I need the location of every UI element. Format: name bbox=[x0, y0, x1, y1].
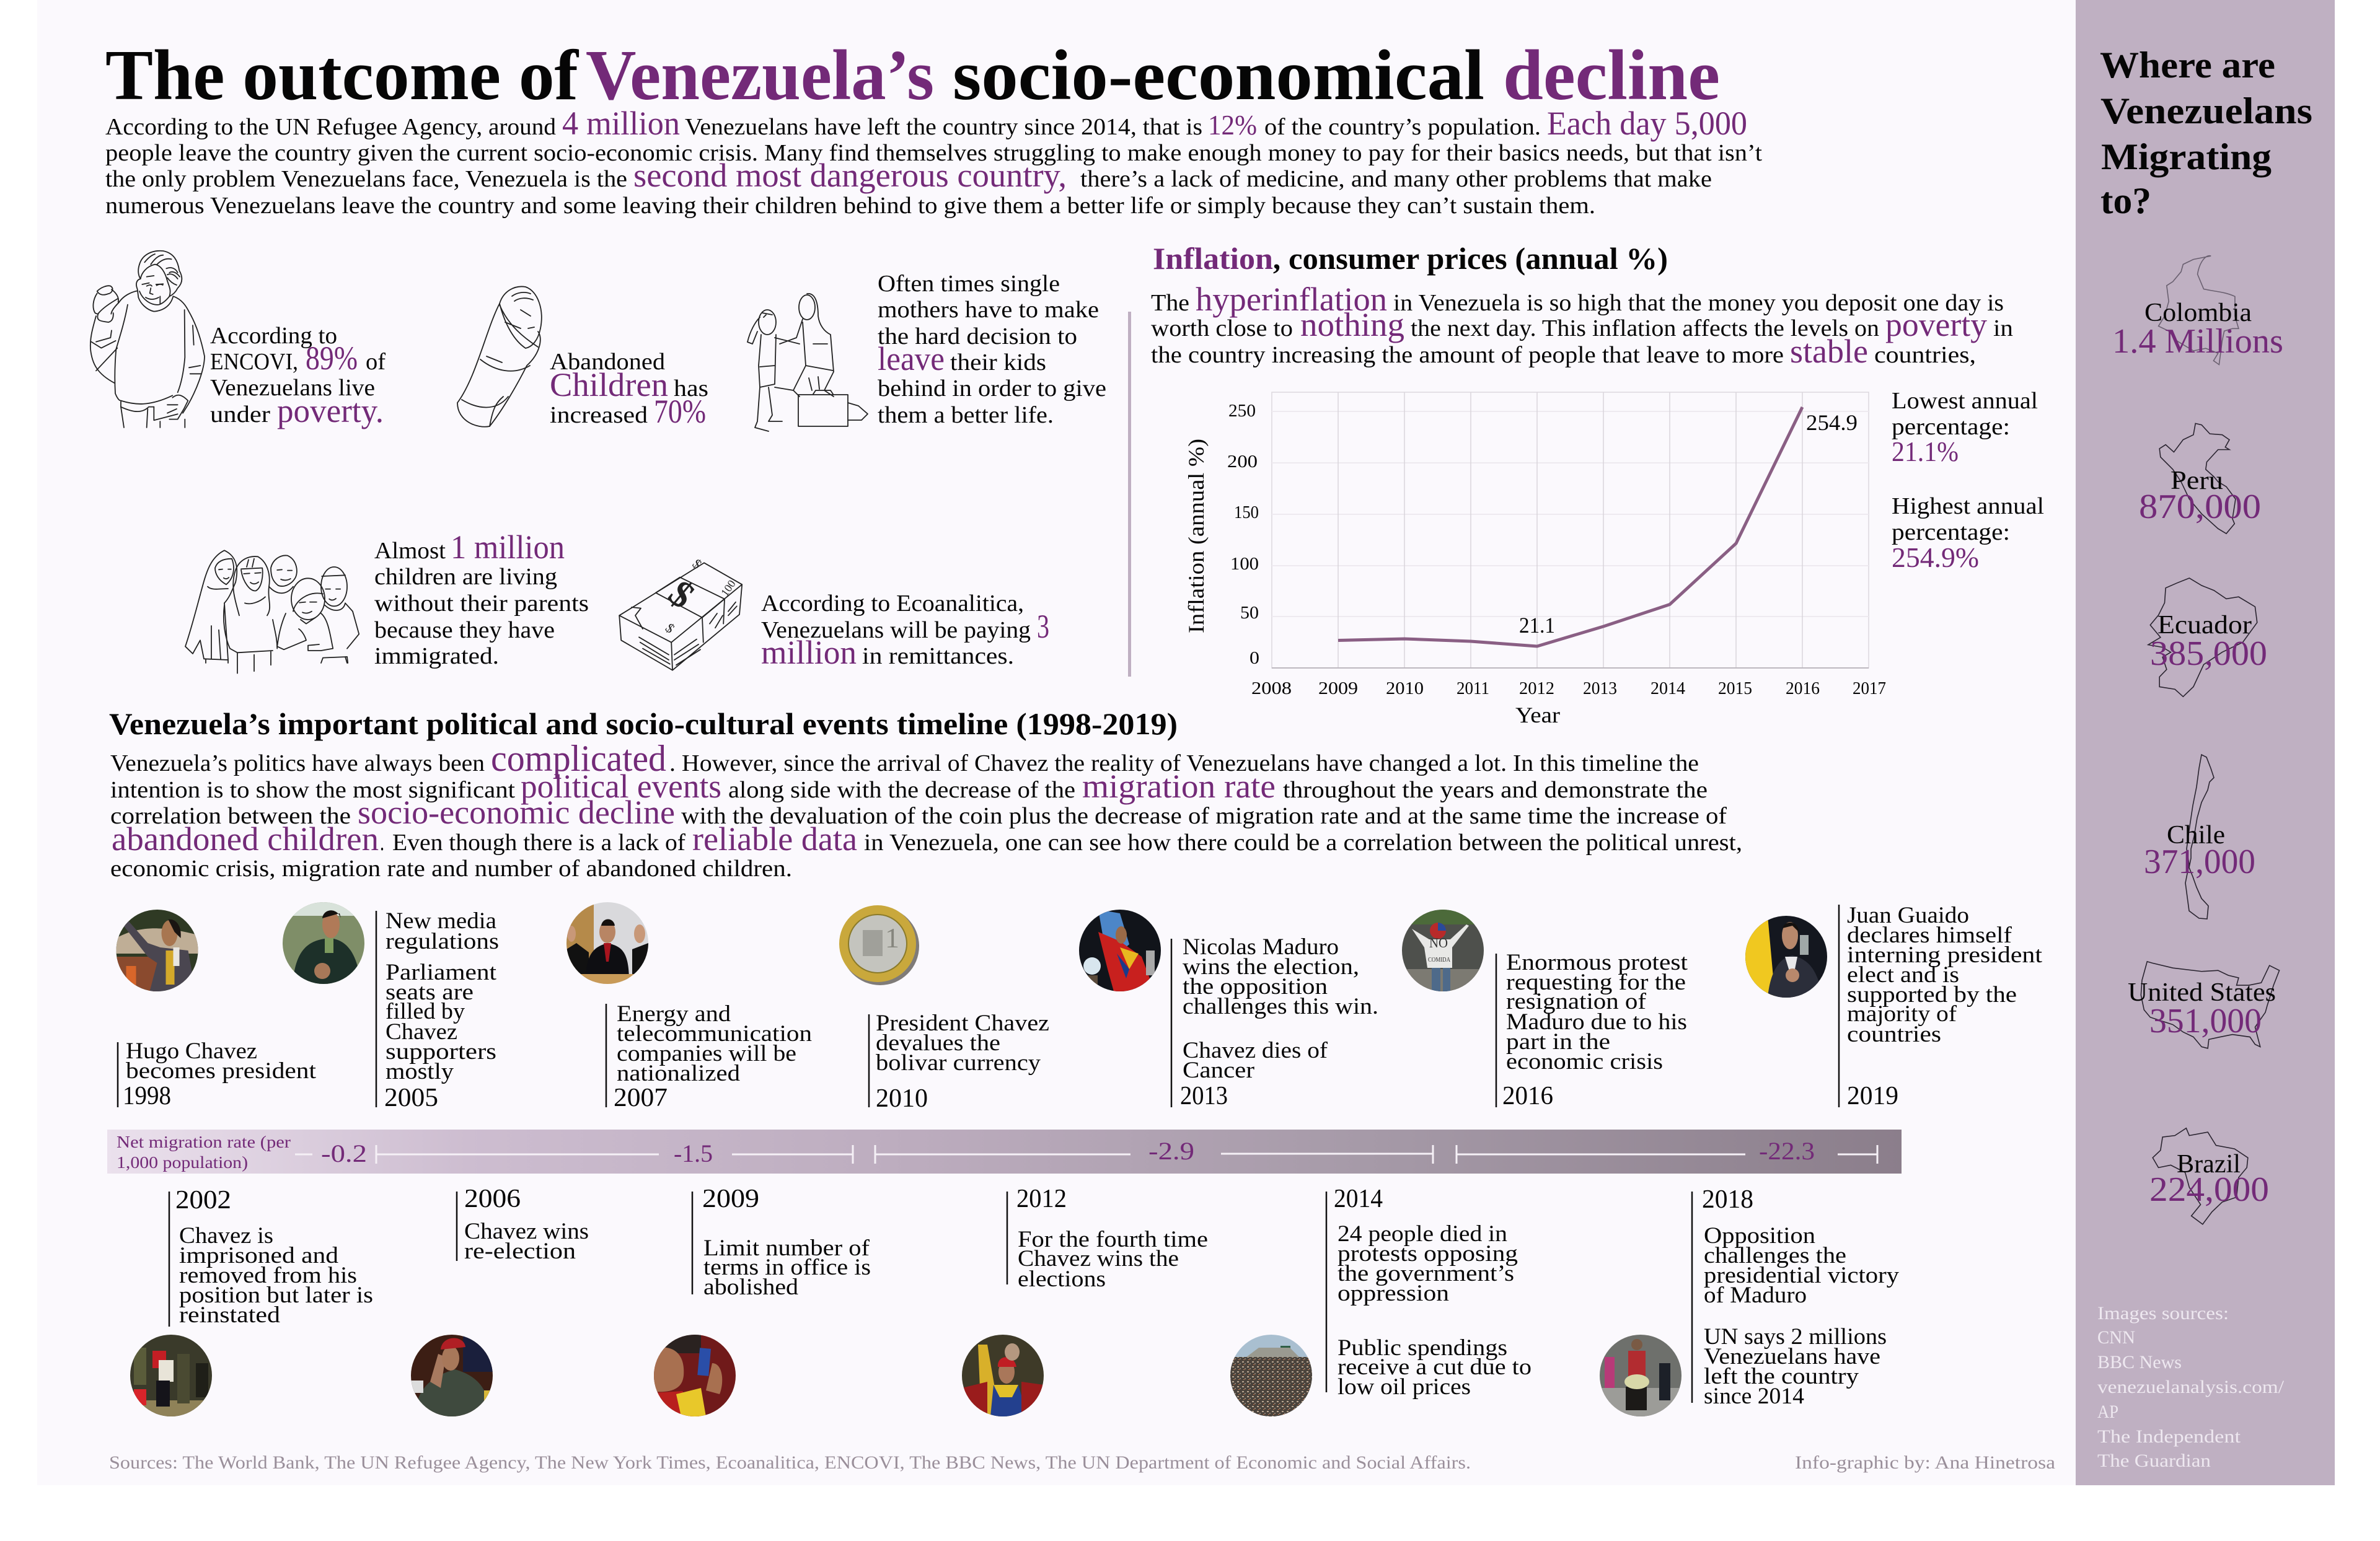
line chart: inflation: 254.9 bbox=[1806, 410, 1858, 435]
text block: 89% poverty: 89% bbox=[306, 340, 358, 377]
callout: lowest and highest annual percentage: percentage: bbox=[1892, 414, 2010, 440]
image sources list bbox=[2097, 1303, 2285, 1471]
timeline entry: 2007: telecommunication bbox=[617, 1021, 812, 1047]
net migration rate band: -1.5 bbox=[674, 1139, 713, 1167]
timeline entry: 2005: Chavez bbox=[386, 1019, 457, 1045]
callout: lowest and highest annual percentage: percentage: bbox=[1892, 519, 2010, 545]
intro paragraph: Venezuelans have left the country since 2014, that is bbox=[685, 114, 1202, 140]
timeline entry: 2010: 2010 bbox=[876, 1084, 928, 1113]
inflation paragraph: The bbox=[1151, 290, 1189, 316]
timeline entry: 2007: 2007 bbox=[614, 1084, 668, 1112]
timeline entry: 1998: Hugo Chavez bbox=[126, 1038, 257, 1064]
image sources list: The Independent bbox=[2097, 1426, 2241, 1447]
timeline entry: 2006: re-election bbox=[464, 1239, 576, 1264]
photo: 2002 coup crowd bbox=[130, 1335, 212, 1416]
timeline entry: 2019 bbox=[1839, 903, 2043, 1110]
icon: stack of money: $ bbox=[661, 573, 702, 617]
panel heading: Venezuelans bbox=[2100, 90, 2312, 131]
text block: 89% poverty: poverty. bbox=[277, 392, 384, 429]
timeline entry: 2019: countries bbox=[1847, 1022, 1941, 1047]
timeline entry: 2012: Chavez wins the bbox=[1018, 1246, 1179, 1271]
callout: lowest and highest annual percentage bbox=[1892, 388, 2044, 573]
timeline entry: 2010 bbox=[869, 1011, 1049, 1113]
text block: 1 million children: without their parents bbox=[374, 590, 589, 617]
map and figure: Ecuador: Ecuador bbox=[2157, 611, 2252, 639]
timeline entry: 2005: seats are bbox=[386, 980, 474, 1005]
callout: lowest and highest annual percentage: Highest annual bbox=[1892, 493, 2044, 519]
text block: single mothers: the hard decision to bbox=[878, 323, 1077, 349]
timeline paragraph: . bbox=[380, 830, 384, 856]
timeline entry: 2009: Limit number of bbox=[703, 1236, 870, 1261]
timeline entry: 2013: Chavez dies of bbox=[1183, 1038, 1328, 1063]
footer: sources: Sources: The World Bank, The UN Refugee Agency, The New York Times, Ecoanalitica, ENCOVI, The BBC News, The UN Department of Economic and Social Affairs. bbox=[109, 1452, 1471, 1473]
timeline entry: 2014: receive a cut due to bbox=[1338, 1354, 1532, 1380]
timeline entry: 2018: since 2014 bbox=[1704, 1384, 1804, 1409]
timeline entry: 2010: President Chavez bbox=[876, 1011, 1049, 1036]
timeline entry: 2019: interning president bbox=[1847, 942, 2043, 968]
timeline entry: 2005: Parliament bbox=[386, 960, 497, 985]
photo: crowd protest 2014 bbox=[1230, 1335, 1312, 1416]
text block: 1 million children: 1 million bbox=[451, 529, 565, 566]
timeline entry: 2002 bbox=[169, 1186, 373, 1328]
photo: bolivar coin: 1 bbox=[885, 922, 899, 954]
title: The outcome of bbox=[105, 36, 579, 115]
intro paragraph: numerous Venezuelans leave the country and some leaving their children behind to give them a better life or simply because they can’t sustain them. bbox=[105, 193, 1595, 219]
timeline entry: 2016: economic crisis bbox=[1506, 1049, 1663, 1074]
timeline entry: 1998: becomes president bbox=[126, 1058, 317, 1084]
text block: single mothers: their kids bbox=[950, 349, 1046, 375]
timeline entry: 2019: elect and is bbox=[1847, 962, 1959, 988]
timeline entry: 2013 bbox=[1171, 934, 1378, 1110]
line chart: inflation: 21.1 bbox=[1519, 613, 1555, 638]
photo: Guaido 2019 bbox=[1745, 916, 1827, 998]
timeline paragraph: migration rate bbox=[1082, 768, 1276, 805]
inflation paragraph: nothing bbox=[1300, 306, 1404, 343]
timeline entry: 2013: 2013 bbox=[1180, 1082, 1228, 1110]
map and figure: Peru: 870,000 bbox=[2139, 488, 2261, 526]
inflation paragraph: worth close to bbox=[1151, 315, 1293, 341]
timeline entry: 2002: position but later is bbox=[179, 1283, 373, 1308]
timeline entry: 2018: challenges the bbox=[1704, 1243, 1846, 1268]
intro paragraph: According to the UN Refugee Agency, around bbox=[105, 114, 556, 140]
photo: Maduro 2013 bbox=[1079, 910, 1161, 991]
intro paragraph: 4 million bbox=[562, 105, 680, 142]
timeline entry: 2019: supported by the bbox=[1847, 982, 2017, 1008]
map and figure: United States: 351,000 bbox=[2149, 1002, 2262, 1040]
photo: migrants walking 2018 bbox=[1600, 1335, 1681, 1416]
icon: group of children bbox=[185, 550, 359, 674]
panel heading: Where are bbox=[2100, 45, 2275, 86]
net migration rate band: -0.2 bbox=[321, 1139, 367, 1167]
callout: lowest and highest annual percentage: Lowest annual bbox=[1892, 388, 2038, 414]
line chart: inflation: 2014 bbox=[1651, 679, 1685, 698]
line chart: inflation: 100 bbox=[1230, 555, 1259, 574]
text block: abandoned children bbox=[550, 349, 708, 430]
icon: stack of money bbox=[619, 556, 742, 670]
timeline entry: 2018: left the country bbox=[1704, 1364, 1859, 1389]
icon: swaddled baby bbox=[457, 286, 542, 427]
timeline entry: 2018 bbox=[1692, 1185, 1900, 1409]
timeline paragraph: reliable data bbox=[692, 820, 857, 858]
timeline entry: 2009: abolished bbox=[703, 1275, 799, 1300]
line chart: inflation: 50 bbox=[1240, 604, 1259, 623]
photo: protest 2016: COMIDA bbox=[1428, 956, 1450, 964]
timeline paragraph: . However, since the arrival of Chavez the reality of Venezuelans have changed a lot. In this timeline the bbox=[669, 750, 1699, 776]
heading: inflation: consumer prices (annual %) bbox=[1289, 241, 1668, 276]
inflation paragraph: the country increasing the amount of people that leave to more bbox=[1151, 342, 1784, 368]
map and figure: Colombia bbox=[2112, 256, 2283, 364]
title: Venezuela’s bbox=[586, 36, 934, 115]
intro paragraph: people leave the country given the current socio-economic crisis. Many find themselves struggling to make enough money to pay for their basics needs, but that isn’t bbox=[105, 140, 1762, 166]
map and figure: Brazil: 224,000 bbox=[2149, 1170, 2269, 1209]
title: socio-economical bbox=[953, 36, 1484, 115]
text block: remittances: million bbox=[761, 634, 857, 671]
timeline entry: 2014: low oil prices bbox=[1338, 1374, 1471, 1400]
heading: timeline: Venezuela’s important political and socio-cultural events timeline (1998-2019) bbox=[109, 706, 1178, 741]
icon: stack of money: 100 bbox=[718, 577, 738, 599]
timeline entry: 2016: 2016 bbox=[1502, 1082, 1553, 1110]
text block: 89% poverty: According to bbox=[210, 323, 337, 349]
text block: 1 million children: immigrated. bbox=[374, 643, 499, 669]
timeline paragraph: Even though there is a lack of bbox=[392, 830, 685, 856]
timeline entry: 2018: UN says 2 millions bbox=[1704, 1324, 1887, 1350]
timeline entry: 2002: Chavez is bbox=[179, 1223, 273, 1249]
net migration rate band bbox=[107, 1130, 1902, 1174]
inflation paragraph bbox=[1151, 281, 2013, 370]
line chart: inflation: 2011 bbox=[1457, 679, 1489, 698]
intro paragraph: second most dangerous country, bbox=[633, 157, 1067, 194]
panel heading bbox=[2100, 45, 2312, 221]
line chart: inflation: 2015 bbox=[1718, 679, 1752, 698]
timeline entry: 2013: Cancer bbox=[1183, 1058, 1254, 1083]
map and figure: Peru bbox=[2139, 423, 2261, 533]
text block: single mothers bbox=[878, 271, 1106, 428]
text block: single mothers: leave bbox=[878, 340, 945, 377]
inflation paragraph: hyperinflation bbox=[1196, 281, 1387, 318]
timeline entry: 2018: Venezuelans have bbox=[1704, 1344, 1880, 1369]
timeline entry: 2005: 2005 bbox=[384, 1084, 438, 1112]
image sources list: venezuelanalysis.com/ bbox=[2097, 1377, 2285, 1397]
timeline entry: 2018: presidential victory bbox=[1704, 1263, 1900, 1288]
timeline entry: 2014: Public spendings bbox=[1338, 1335, 1507, 1361]
inflation paragraph: countries, bbox=[1874, 342, 1976, 368]
photo: protest 2016 bbox=[1402, 910, 1484, 991]
text block: 89% poverty: Venezuelans live bbox=[210, 375, 375, 401]
line chart: inflation: Year bbox=[1515, 703, 1560, 727]
text block: 1 million children bbox=[374, 529, 589, 669]
intro paragraph: the only problem Venezuelans face, Venezuela is the bbox=[105, 166, 627, 192]
photo: Hugo Chavez 1998 bbox=[117, 910, 198, 991]
timeline entry: 2018: of Maduro bbox=[1704, 1283, 1807, 1308]
photo: protest 2016: NO bbox=[1429, 935, 1448, 951]
net migration rate band: -2.9 bbox=[1148, 1137, 1194, 1165]
inflation paragraph: in bbox=[1993, 315, 2013, 341]
timeline entry: 2016: Maduro due to his bbox=[1506, 1009, 1687, 1035]
map and figure: Ecuador bbox=[2148, 578, 2267, 696]
text block: single mothers: behind in order to give bbox=[878, 375, 1106, 402]
timeline entry: 2014 bbox=[1326, 1185, 1532, 1400]
inflation paragraph: poverty bbox=[1885, 306, 1987, 343]
title: decline bbox=[1503, 36, 1720, 115]
inflation paragraph: the next day. This inflation affects the levels on bbox=[1411, 315, 1879, 341]
image sources list: AP bbox=[2097, 1402, 2118, 1422]
line chart: inflation: 2008 bbox=[1251, 679, 1292, 698]
text block: remittances bbox=[761, 590, 1049, 671]
line chart: inflation bbox=[1184, 392, 1886, 727]
timeline entry: 2002: imprisoned and bbox=[179, 1243, 339, 1268]
text block: remittances: According to Ecoanalitica, bbox=[761, 590, 1024, 617]
timeline paragraph: with the devaluation of the coin plus the decrease of migration rate and at the same time the increase of bbox=[681, 803, 1727, 829]
timeline paragraph: economic crisis, migration rate and number of abandoned children. bbox=[110, 856, 792, 882]
footer: author: Info-graphic by: Ana Hinetrosa bbox=[1795, 1452, 2055, 1473]
photo: Chavez 2012 rally bbox=[962, 1335, 1044, 1416]
text block: single mothers: Often times single bbox=[878, 271, 1060, 297]
intro paragraph: there’s a lack of medicine, and many other problems that make bbox=[1080, 166, 1712, 192]
text block: remittances: Venezuelans will be paying bbox=[761, 617, 1031, 643]
timeline entry: 2007: nationalized bbox=[617, 1061, 741, 1086]
heading: inflation: , bbox=[1273, 241, 1280, 276]
map and figure: Colombia: Colombia bbox=[2144, 299, 2252, 327]
heading: inflation: Inflation bbox=[1153, 241, 1273, 276]
line chart: inflation: 0 bbox=[1250, 649, 1259, 668]
inflation paragraph: stable bbox=[1790, 333, 1868, 370]
timeline entry: 2007: Energy and bbox=[617, 1001, 731, 1027]
map and figure: Chile bbox=[2144, 755, 2255, 919]
map and figure: Chile: Chile bbox=[2167, 821, 2225, 850]
image sources list: CNN bbox=[2097, 1327, 2135, 1348]
photo: bolivar coin bbox=[839, 905, 919, 985]
line chart: inflation: 2016 bbox=[1786, 679, 1820, 698]
image sources list: The Guardian bbox=[2097, 1451, 2211, 1471]
timeline entry: 1998 bbox=[118, 1038, 317, 1110]
timeline paragraph: correlation between the bbox=[110, 803, 351, 829]
timeline entry: 2014: 24 people died in bbox=[1338, 1221, 1507, 1247]
text block: 89% poverty: ENCOVI, bbox=[210, 349, 298, 375]
timeline paragraph: in Venezuela, one can see how there could be a correlation between the political unrest, bbox=[864, 830, 1742, 856]
map and figure: United States bbox=[2128, 962, 2280, 1048]
panel heading: Migrating bbox=[2101, 136, 2272, 177]
line chart: inflation: 2017 bbox=[1853, 679, 1886, 698]
timeline entry: 2006: Chavez wins bbox=[464, 1219, 589, 1244]
timeline entry: 2006 bbox=[457, 1185, 589, 1264]
icon: elderly woman line drawing bbox=[90, 251, 205, 428]
panel: where are Venezuelans migrating bbox=[2076, 0, 2335, 1485]
timeline paragraph: along side with the decrease of the bbox=[728, 777, 1075, 803]
timeline entry: 2005 bbox=[376, 908, 499, 1112]
timeline entry: 2014: the government’s bbox=[1338, 1261, 1514, 1286]
timeline entry: 2016: part in the bbox=[1506, 1029, 1610, 1055]
text block: 1 million children: because they have bbox=[374, 617, 555, 643]
timeline entry: 2005: regulations bbox=[386, 929, 499, 954]
callout: lowest and highest annual percentage: 21.1% bbox=[1892, 436, 1959, 467]
intro paragraph: Each day 5,000 bbox=[1547, 105, 1747, 142]
line chart: inflation: 2013 bbox=[1583, 679, 1617, 698]
timeline entry: 2005: New media bbox=[386, 908, 496, 934]
intro paragraph: 12% bbox=[1208, 109, 1257, 141]
text block: abandoned children: increased bbox=[550, 402, 648, 428]
timeline entry: 2019: majority of bbox=[1847, 1001, 1957, 1027]
timeline entry: 2007: companies will be bbox=[617, 1041, 796, 1066]
timeline entry: 2002: removed from his bbox=[179, 1263, 357, 1288]
timeline entry: 2016: resignation of bbox=[1506, 989, 1647, 1014]
photo: Chavez salute 2006 bbox=[411, 1335, 493, 1416]
line chart: inflation: Inflation (annual %) bbox=[1184, 439, 1209, 633]
inflation paragraph: in Venezuela is so high that the money you deposit one day is bbox=[1393, 290, 2004, 316]
timeline entry: 2009 bbox=[692, 1185, 871, 1300]
timeline paragraph: intention is to show the most significant bbox=[110, 777, 515, 803]
text block: single mothers: mothers have to make bbox=[878, 297, 1099, 323]
timeline entry: 2009: terms in office is bbox=[703, 1255, 871, 1280]
text block: abandoned children: Abandoned bbox=[550, 349, 665, 375]
timeline entry: 2005: supporters bbox=[386, 1039, 496, 1065]
timeline entry: 2019: 2019 bbox=[1847, 1082, 1898, 1110]
text block: abandoned children: Children bbox=[550, 366, 668, 403]
timeline entry: 2012: elections bbox=[1018, 1267, 1106, 1292]
line chart: inflation: 200 bbox=[1227, 452, 1258, 472]
timeline entry: 2014: protests opposing bbox=[1338, 1241, 1518, 1267]
map and figure: Chile: 371,000 bbox=[2144, 843, 2255, 881]
timeline entry: 2010: bolivar currency bbox=[876, 1050, 1041, 1076]
icon: mother and child with suitcase bbox=[747, 294, 868, 431]
timeline entry: 2012: 2012 bbox=[1016, 1185, 1067, 1213]
timeline entry: 2012: For the fourth time bbox=[1018, 1227, 1208, 1252]
timeline entry: 2016: requesting for the bbox=[1506, 970, 1686, 995]
timeline entry: 2012 bbox=[1007, 1185, 1208, 1292]
timeline paragraph: abandoned children bbox=[112, 820, 379, 858]
timeline entry: 2014: 2014 bbox=[1334, 1185, 1383, 1213]
map and figure: Peru: Peru bbox=[2171, 467, 2223, 495]
map and figure: Ecuador: 385,000 bbox=[2150, 634, 2267, 673]
timeline entry: 2014: oppression bbox=[1338, 1281, 1449, 1306]
callout: lowest and highest annual percentage: 254.9% bbox=[1892, 542, 1979, 573]
line chart: inflation: 2012 bbox=[1519, 679, 1554, 698]
text block: abandoned children: has bbox=[674, 375, 708, 402]
timeline entry: 2013: challenges this win. bbox=[1183, 994, 1378, 1019]
map and figure: Brazil: Brazil bbox=[2177, 1150, 2241, 1179]
image sources list: Images sources: bbox=[2097, 1303, 2229, 1324]
timeline entry: 2013: wins the election, bbox=[1183, 954, 1359, 980]
text block: 1 million children: children are living bbox=[374, 564, 557, 590]
text block: abandoned children: 70% bbox=[654, 393, 706, 430]
timeline entry: 2019: Juan Guaido bbox=[1847, 903, 1969, 928]
map and figure: Colombia: 1.4 Millions bbox=[2112, 322, 2283, 361]
text block: 89% poverty bbox=[210, 323, 386, 429]
text block: remittances: 3 bbox=[1037, 608, 1049, 645]
timeline entry: 2009: 2009 bbox=[702, 1185, 759, 1213]
timeline entry: 2005: filled by bbox=[386, 999, 465, 1024]
intro paragraph: of the country’s population. bbox=[1264, 114, 1541, 140]
timeline entry: 2002: 2002 bbox=[175, 1186, 231, 1214]
timeline entry: 2018: 2018 bbox=[1702, 1185, 1753, 1214]
timeline entry: 2016: Enormous protest bbox=[1506, 950, 1688, 975]
timeline entry: 2002: reinstated bbox=[179, 1302, 281, 1328]
text block: single mothers: them a better life. bbox=[878, 402, 1054, 428]
line chart: inflation: 150 bbox=[1234, 503, 1259, 522]
title bbox=[105, 36, 1720, 115]
photo: Chavez 2005 bbox=[283, 902, 364, 984]
timeline paragraph bbox=[110, 738, 1742, 882]
photo: Chavez with constitution 2009 bbox=[654, 1335, 736, 1416]
icon: stack of money: $ bbox=[690, 556, 705, 572]
text block: 89% poverty: under bbox=[210, 402, 270, 428]
timeline paragraph: complicated bbox=[491, 738, 666, 779]
intro paragraph bbox=[105, 105, 1762, 219]
timeline paragraph: political events bbox=[521, 768, 721, 805]
timeline entry: 2013: the opposition bbox=[1183, 974, 1328, 999]
text block: 89% poverty: of bbox=[366, 349, 386, 375]
line chart: inflation: 250 bbox=[1228, 402, 1256, 421]
line chart: inflation: 2009 bbox=[1318, 679, 1358, 698]
timeline paragraph: throughout the years and demonstrate the bbox=[1283, 777, 1708, 803]
photo: press conference 2007 bbox=[566, 902, 648, 984]
net migration rate band: Net migration rate (per bbox=[117, 1133, 291, 1151]
net migration rate band: 1,000 population) bbox=[117, 1153, 248, 1172]
timeline entry: 2005: mostly bbox=[386, 1059, 454, 1084]
timeline entry: 1998: 1998 bbox=[123, 1082, 171, 1110]
timeline entry: 2018: Opposition bbox=[1704, 1223, 1815, 1249]
icon: stack of money: $ bbox=[663, 620, 677, 636]
timeline entry: 2013: Nicolas Maduro bbox=[1183, 934, 1339, 960]
panel heading: to? bbox=[2100, 180, 2151, 221]
line chart: inflation: 2010 bbox=[1386, 679, 1424, 698]
text block: 1 million children: Almost bbox=[374, 538, 446, 564]
text block: remittances: in remittances. bbox=[862, 643, 1014, 669]
timeline entry: 2006: 2006 bbox=[464, 1185, 521, 1213]
timeline entry: 2019: declares himself bbox=[1847, 923, 2012, 948]
map and figure: United States: United States bbox=[2128, 978, 2276, 1007]
timeline entry: 2010: devalues the bbox=[876, 1030, 1000, 1056]
timeline paragraph: socio-economic decline bbox=[358, 794, 675, 831]
timeline entry: 2016 bbox=[1496, 950, 1688, 1110]
net migration rate band: -22.3 bbox=[1759, 1137, 1815, 1165]
map and figure: Brazil bbox=[2149, 1128, 2269, 1224]
image sources list: BBC News bbox=[2097, 1352, 2182, 1372]
timeline entry: 2007 bbox=[606, 1001, 812, 1112]
timeline paragraph: Venezuela’s politics have always been bbox=[110, 750, 485, 776]
